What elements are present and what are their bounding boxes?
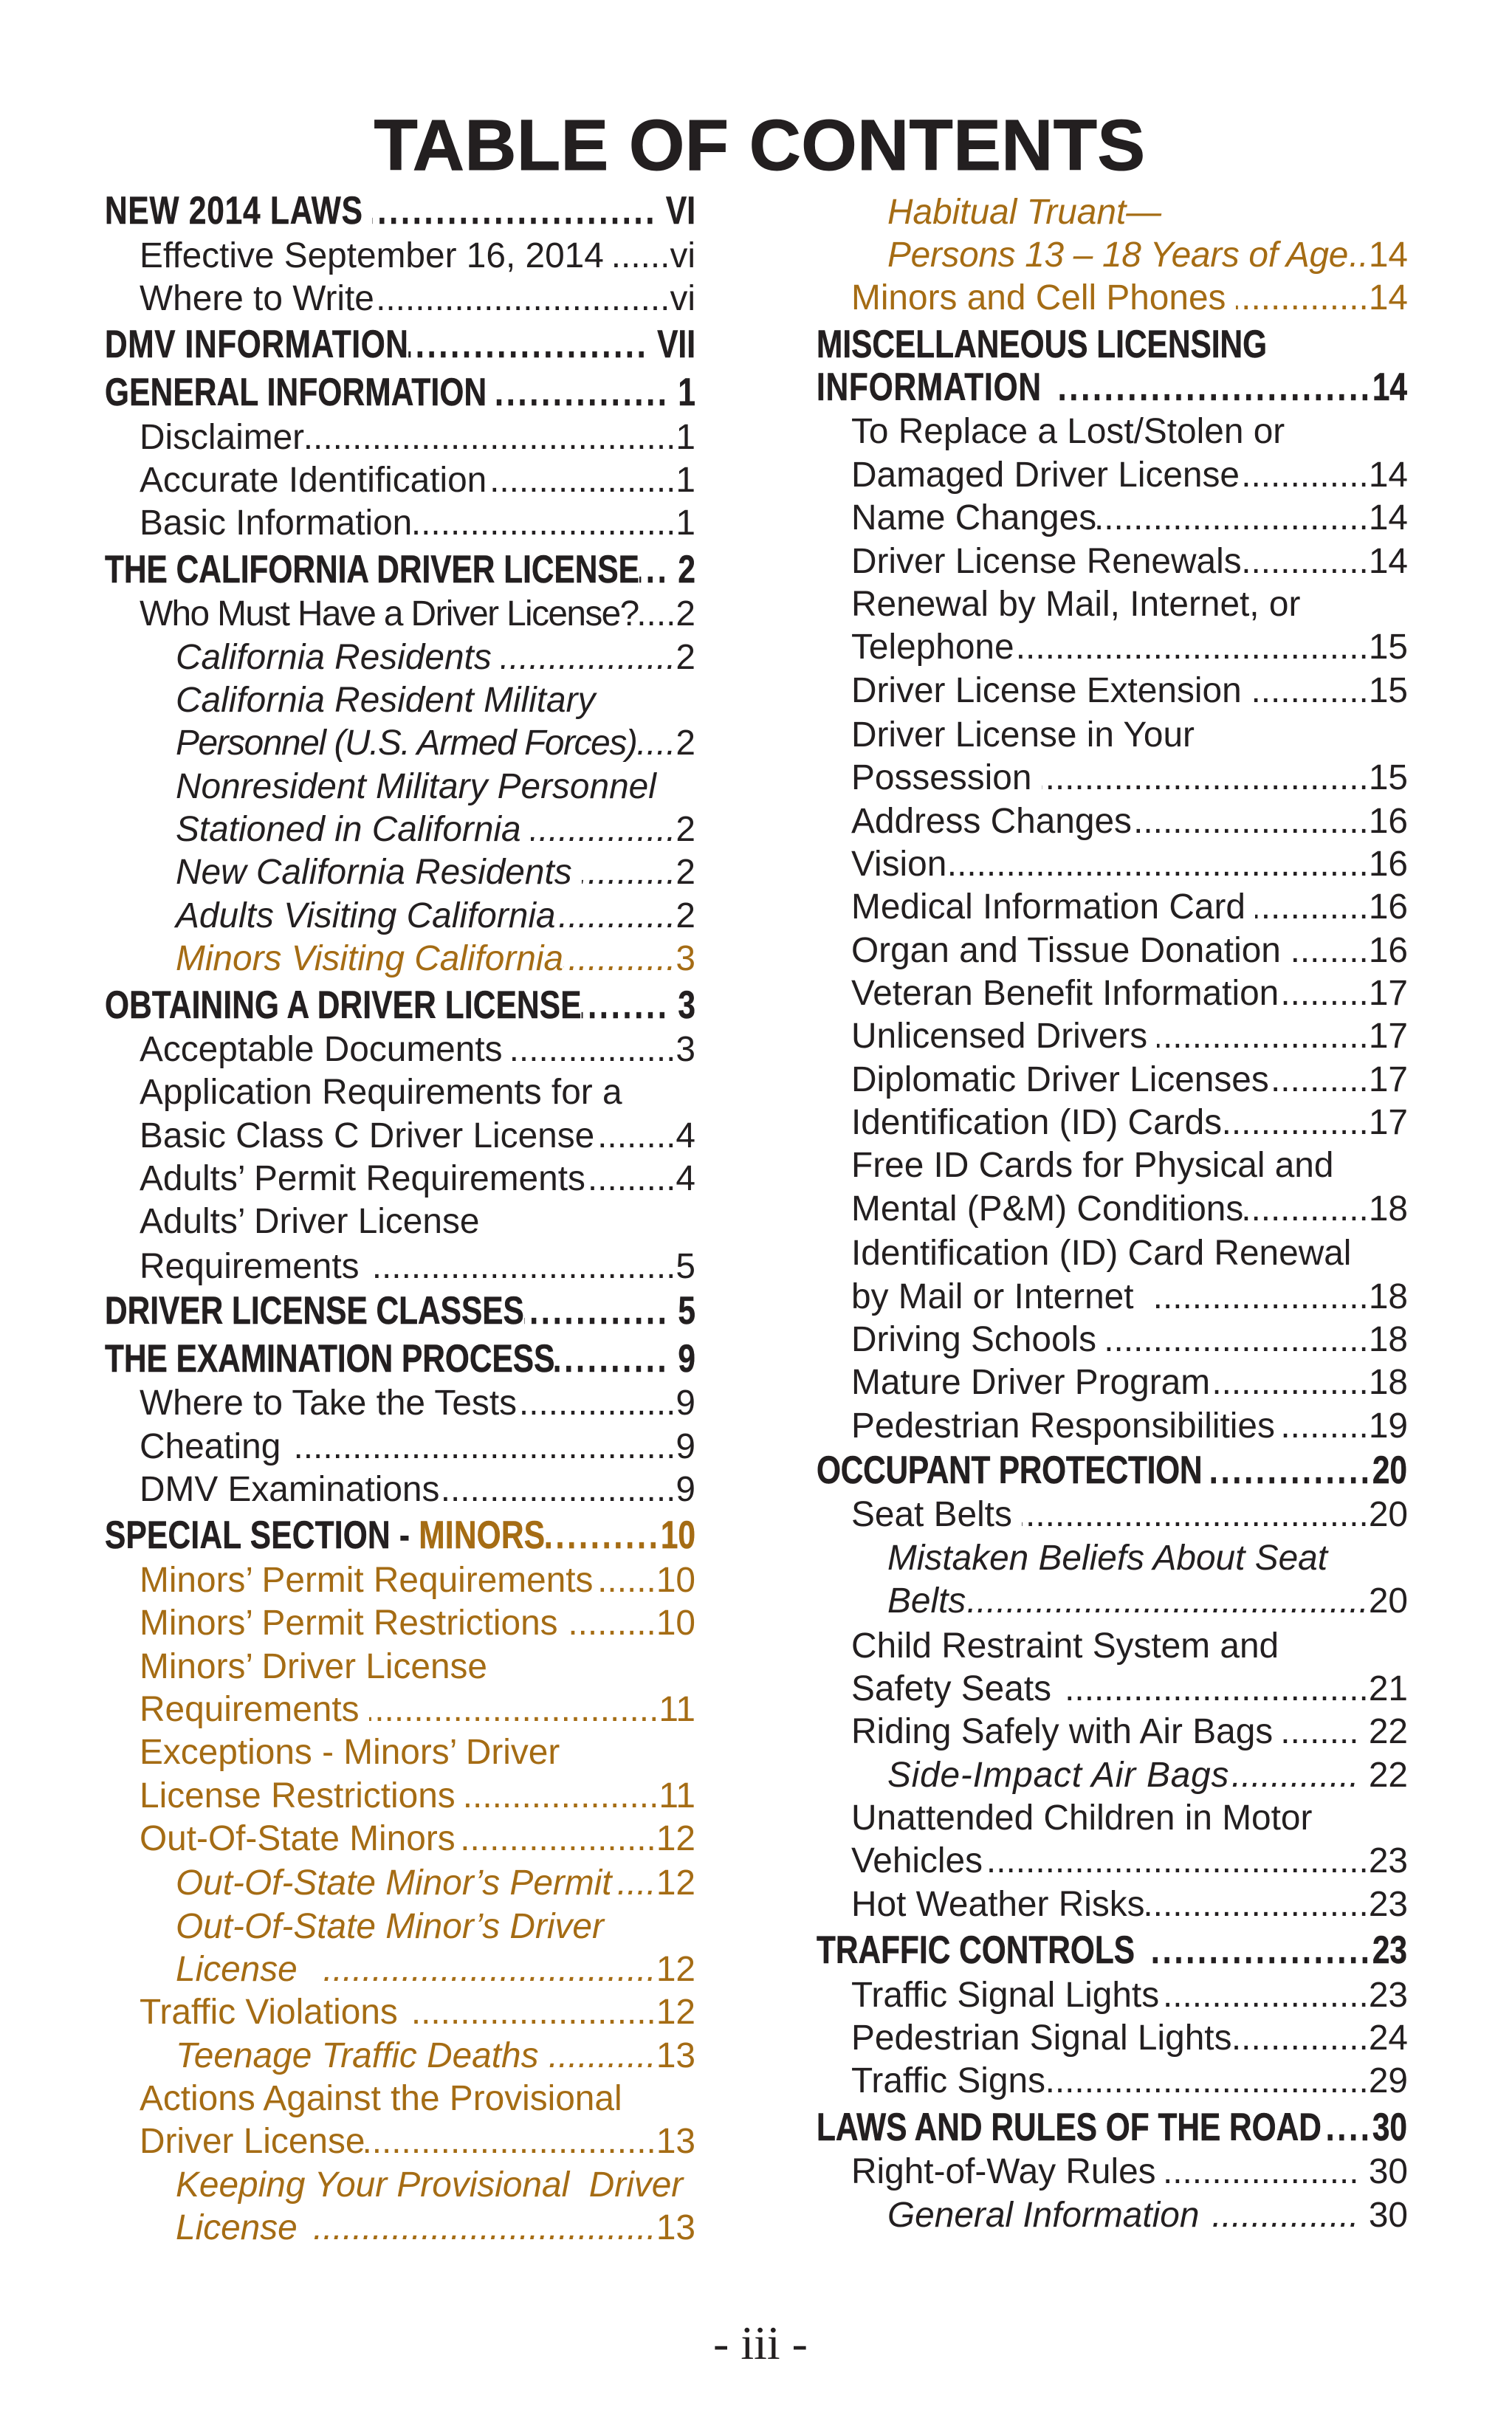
entry: safety seats: ............................... bbox=[1065, 1669, 1369, 1708]
entry: adults' driver license: Adults’ Driver License bbox=[140, 1202, 479, 1241]
entry: out-of-state minors: Out-Of-State Minors bbox=[140, 1819, 456, 1858]
entry: vision: 16 bbox=[1369, 845, 1408, 884]
entry: unlicensed drivers: Unlicensed Drivers bbox=[851, 1017, 1147, 1056]
entry: free id cards: Free ID Cards for Physical and bbox=[851, 1146, 1333, 1185]
entry: keeping your provisional driver: Keeping Your Provisional Driver bbox=[176, 2165, 683, 2205]
entry: stationed in california: ............... bbox=[531, 810, 676, 849]
entry: license bbox=[176, 1948, 695, 1991]
entry: accurate identification: ................... bbox=[489, 461, 676, 500]
entry: minors' driver license: Minors’ Driver License bbox=[140, 1647, 487, 1686]
entry: habitual truant: Habitual Truant— bbox=[887, 193, 1161, 232]
entry: requirements bbox=[140, 1247, 695, 1286]
entry: hot weather risks bbox=[851, 1883, 1408, 1926]
heading: the examination process: 9 bbox=[678, 1337, 695, 1381]
entry: by mail or internet: 18 bbox=[1369, 1277, 1408, 1316]
entry: right-of-way rules bbox=[851, 2151, 1408, 2193]
title: TABLE OF CONTENTS bbox=[374, 105, 1146, 185]
entry: driver license extension: Driver License Extension bbox=[851, 671, 1242, 710]
entry: general information: General Information bbox=[887, 2196, 1199, 2235]
entry: who must have a driver license: 2 bbox=[676, 594, 695, 633]
entry: traffic signs: ................................. bbox=[1045, 2061, 1369, 2100]
entry: persons 13 to 18 years of age: Persons 13 – 18 Years of Age bbox=[887, 236, 1348, 275]
entry: license bbox=[176, 2207, 695, 2250]
entry: california residents: .................. bbox=[501, 638, 676, 677]
entry: requirements bbox=[140, 1690, 695, 1729]
entry: teenage traffic deaths bbox=[176, 2035, 695, 2078]
entry: disclaimer: 1 bbox=[676, 418, 695, 457]
entry: requirements: 5 bbox=[676, 1247, 695, 1286]
entry: acceptable documents: Acceptable Documents bbox=[140, 1030, 503, 1069]
entry: requirements: .............................. bbox=[369, 1690, 659, 1729]
entry: who must have a driver license: Who Must Have a Driver License? bbox=[140, 594, 639, 633]
entry: where to take the tests bbox=[140, 1384, 695, 1423]
entry: accurate identification: 1 bbox=[676, 461, 695, 500]
entry: where to write: vi bbox=[670, 279, 695, 318]
entry: minors visiting california: 3 bbox=[676, 939, 695, 978]
entry: by mail or internet: by Mail or Internet bbox=[851, 1277, 1134, 1316]
entry: minors and cell phones bbox=[851, 277, 1408, 320]
entry: possession: Possession bbox=[851, 758, 1031, 797]
entry: name changes: ............................ bbox=[1096, 498, 1369, 537]
entry: california residents bbox=[176, 638, 695, 677]
entry: vehicles: 23 bbox=[1369, 1841, 1408, 1880]
entry: effective september 16, 2014: vi bbox=[670, 236, 695, 275]
heading: miscellaneous licensing: MISCELLANEOUS LICENSING bbox=[817, 323, 1267, 366]
entry: traffic violations: Traffic Violations bbox=[140, 1993, 398, 2032]
entry: out-of-state minor's driver: Out-Of-State Minor’s Driver bbox=[176, 1907, 604, 1946]
entry: right-of-way rules: .................... bbox=[1166, 2152, 1359, 2191]
entry: license: ................................... bbox=[313, 2208, 656, 2247]
entry: adults' permit requirements: ......... bbox=[588, 1159, 676, 1198]
entry: mistaken beliefs about seat: Mistaken Beliefs About Seat bbox=[887, 1539, 1327, 1578]
entry: traffic violations bbox=[140, 1991, 695, 2034]
entry: vehicles: ....................................... bbox=[986, 1841, 1369, 1880]
entry: hot weather risks: 23 bbox=[1369, 1885, 1408, 1924]
heading: general information: 1 bbox=[678, 371, 695, 414]
entry: teenage traffic deaths: Teenage Traffic Deaths bbox=[176, 2036, 539, 2075]
entry: general information: 30 bbox=[1369, 2196, 1408, 2235]
entry: organ and tissue donation: Organ and Tissue Donation bbox=[851, 931, 1281, 970]
entry: diplomatic driver licenses: 17 bbox=[1369, 1060, 1408, 1099]
heading: special section minors: 10 bbox=[661, 1513, 695, 1557]
entry: organ and tissue donation: 16 bbox=[1369, 931, 1408, 970]
entry: minors' permit requirements: Minors’ Permit Requirements bbox=[140, 1561, 593, 1600]
entry: vision: ........................................... bbox=[947, 845, 1369, 884]
heading: laws and rules of the road: 30 bbox=[1372, 2106, 1407, 2149]
entry: traffic signs: 29 bbox=[1369, 2061, 1408, 2100]
entry: driver license: .............................. bbox=[365, 2122, 656, 2161]
entry: adults visiting california: 2 bbox=[676, 896, 695, 935]
heading: dmv information bbox=[105, 323, 695, 366]
entry: basic class c driver license: ........ bbox=[597, 1116, 676, 1155]
heading: driver license classes: DRIVER LICENSE CLASSES bbox=[105, 1289, 524, 1333]
entry: hot weather risks: Hot Weather Risks bbox=[851, 1885, 1145, 1924]
entry: disclaimer bbox=[140, 418, 695, 457]
entry: safety seats: Safety Seats bbox=[851, 1669, 1051, 1708]
entry: driver license in your: Driver License in Your bbox=[851, 715, 1195, 755]
entry: where to take the tests: 9 bbox=[676, 1384, 695, 1423]
heading: traffic controls: TRAFFIC CONTROLS bbox=[817, 1928, 1135, 1972]
entry: traffic signs bbox=[851, 2060, 1408, 2103]
entry: acceptable documents bbox=[140, 1030, 695, 1069]
entry: hot weather risks: ....................... bbox=[1145, 1885, 1369, 1924]
entry: mature driver program: 18 bbox=[1369, 1363, 1408, 1402]
entry: license restrictions: 11 bbox=[659, 1776, 695, 1815]
entry: minors' permit requirements: 10 bbox=[656, 1561, 695, 1600]
entry: out-of-state minor's permit: 12 bbox=[656, 1863, 695, 1903]
entry: license: .................................. bbox=[323, 1950, 656, 1989]
heading: special section minors: .......... bbox=[545, 1514, 661, 1557]
entry: persons 13 to 18 years of age: 14 bbox=[1369, 236, 1408, 275]
entry: diplomatic driver licenses bbox=[851, 1059, 1408, 1102]
entry: by mail or internet bbox=[851, 1276, 1408, 1319]
entry: name changes bbox=[851, 497, 1408, 540]
entry: riding safely with air bags: 22 bbox=[1369, 1712, 1408, 1751]
entry: driving schools: ........................... bbox=[1106, 1320, 1369, 1359]
entry: where to write bbox=[140, 279, 695, 318]
entry: identification cards: ............... bbox=[1222, 1103, 1369, 1142]
entry: where to take the tests: ................ bbox=[519, 1384, 676, 1423]
entry: diplomatic driver licenses: .......... bbox=[1271, 1060, 1369, 1099]
entry: acceptable documents: 3 bbox=[676, 1030, 695, 1069]
heading: general information bbox=[105, 371, 695, 414]
entry: out-of-state minors: 12 bbox=[656, 1819, 695, 1858]
entry: personnel: .... bbox=[636, 724, 676, 763]
entry: pedestrian responsibilities bbox=[851, 1405, 1408, 1448]
entry: dmv examinations bbox=[140, 1470, 695, 1509]
entry: belts: ......................................... bbox=[966, 1581, 1369, 1621]
entry: medical information card: 16 bbox=[1369, 887, 1408, 927]
entry: dmv examinations: DMV Examinations bbox=[140, 1470, 439, 1509]
entry: minors' permit restrictions: ......... bbox=[568, 1604, 656, 1643]
entry: driver license renewals: Driver License Renewals bbox=[851, 542, 1242, 581]
entry: minors and cell phones: Minors and Cell Phones bbox=[851, 278, 1226, 317]
entry: telephone: .................................... bbox=[1016, 628, 1369, 667]
entry: cheating bbox=[140, 1427, 695, 1466]
entry: mature driver program: Mature Driver Program bbox=[851, 1363, 1210, 1402]
entry: basic information: Basic Information bbox=[140, 504, 412, 543]
entry: persons 13 to 18 years of age: .. bbox=[1349, 236, 1369, 275]
heading: obtaining a driver license: OBTAINING A DRIVER LICENSE bbox=[105, 983, 582, 1027]
entry: california resident military: California Resident Military bbox=[176, 681, 595, 720]
entry: identification cards bbox=[851, 1102, 1408, 1144]
entry: possession: 15 bbox=[1369, 758, 1408, 797]
entry: mental conditions: Mental (P&M) Conditions bbox=[851, 1189, 1243, 1229]
entry: mental conditions: 18 bbox=[1369, 1189, 1408, 1229]
entry: requirements: 11 bbox=[659, 1690, 695, 1729]
heading: driver license classes: 5 bbox=[678, 1289, 695, 1333]
entry: minors and cell phones: 14 bbox=[1369, 278, 1408, 317]
heading: occupant protection: .............. bbox=[1211, 1449, 1372, 1492]
entry: stationed in california: Stationed in California bbox=[176, 810, 521, 849]
entry: side-impact air bags: Side-Impact Air Bags bbox=[887, 1756, 1229, 1795]
heading: information: 14 bbox=[1372, 365, 1407, 409]
entry: vision: Vision bbox=[851, 845, 946, 884]
entry: driver license bbox=[140, 2120, 695, 2163]
entry: traffic signal lights bbox=[851, 1974, 1408, 2017]
entry: address changes: Address Changes bbox=[851, 802, 1132, 841]
entry: adults' permit requirements: 4 bbox=[676, 1159, 695, 1198]
entry: disclaimer: Disclaimer bbox=[140, 418, 304, 457]
heading: occupant protection: OCCUPANT PROTECTION bbox=[817, 1449, 1202, 1492]
entry: right-of-way rules: Right-of-Way Rules bbox=[851, 2152, 1156, 2191]
entry: out-of-state minors: .................... bbox=[460, 1819, 656, 1858]
entry: requirements: ................................ bbox=[369, 1247, 676, 1286]
entry: pedestrian responsibilities: Pedestrian Responsibilities bbox=[851, 1406, 1275, 1446]
entry: requirements: Requirements bbox=[140, 1247, 360, 1286]
entry: belts: 20 bbox=[1369, 1581, 1408, 1621]
entry: minors' permit restrictions: Minors’ Permit Restrictions bbox=[140, 1604, 558, 1643]
entry: driver license extension: 15 bbox=[1369, 671, 1408, 710]
entry: driving schools: 18 bbox=[1369, 1320, 1408, 1359]
entry: seat belts bbox=[851, 1494, 1408, 1536]
entry: teenage traffic deaths: ........... bbox=[549, 2036, 656, 2075]
entry: basic class c driver license: 4 bbox=[676, 1116, 695, 1155]
entry: minors visiting california: Minors Visiting California bbox=[176, 939, 563, 978]
entry: organ and tissue donation: ........ bbox=[1291, 931, 1369, 970]
entry: driving schools: Driving Schools bbox=[851, 1320, 1096, 1359]
entry: disclaimer: ....................................... bbox=[304, 418, 676, 457]
entry: traffic signal lights: Traffic Signal Lights bbox=[851, 1976, 1159, 2015]
heading: special section minors: SPECIAL SECTION - bbox=[105, 1513, 410, 1557]
entry: adults' permit requirements: Adults’ Permit Requirements bbox=[140, 1159, 585, 1198]
entry: personnel: Personnel (U.S. Armed Forces) bbox=[176, 724, 636, 763]
entry: renewal by mail: Renewal by Mail, Internet, or bbox=[851, 585, 1300, 624]
entry: possession bbox=[851, 757, 1408, 800]
entry: basic information bbox=[140, 504, 695, 543]
entry: new california residents: 2 bbox=[676, 853, 695, 892]
entry: pedestrian responsibilities: ......... bbox=[1280, 1406, 1369, 1446]
heading: obtaining a driver license: 3 bbox=[678, 983, 695, 1027]
entry: driver license extension: ............ bbox=[1251, 671, 1369, 710]
entry: traffic violations: ......................... bbox=[411, 1993, 656, 2032]
entry: license: 12 bbox=[656, 1950, 695, 1989]
entry: side-impact air bags bbox=[887, 1754, 1408, 1797]
entry: driver license: Driver License bbox=[140, 2122, 365, 2161]
entry: unlicensed drivers: ...................... bbox=[1157, 1017, 1369, 1056]
entry: license: License bbox=[176, 2208, 298, 2247]
entry: medical information card: Medical Information Card bbox=[851, 887, 1245, 927]
entry: driving schools bbox=[851, 1319, 1408, 1361]
heading: traffic controls bbox=[817, 1929, 1407, 1972]
heading: occupant protection: 20 bbox=[1372, 1449, 1407, 1492]
entry: dmv examinations: ........................ bbox=[441, 1470, 676, 1509]
entry: where to write: Where to Write bbox=[140, 279, 374, 318]
entry: new california residents: New California Residents bbox=[176, 853, 572, 892]
entry: traffic signal lights: 23 bbox=[1369, 1976, 1408, 2015]
entry: riding safely with air bags: ........ bbox=[1282, 1712, 1359, 1751]
heading: general information: GENERAL INFORMATION bbox=[105, 371, 487, 414]
entry: cheating: Cheating bbox=[140, 1427, 281, 1466]
entry: child restraint system and: Child Restraint System and bbox=[851, 1626, 1279, 1666]
entry: pedestrian signal lights: .............. bbox=[1231, 2018, 1369, 2058]
entry: to replace a lost/stolen or: To Replace a Lost/Stolen or bbox=[851, 412, 1285, 451]
entry: basic class c driver license: Basic Class C Driver License bbox=[140, 1116, 594, 1155]
entry: dmv examinations: 9 bbox=[676, 1470, 695, 1509]
entry: teenage traffic deaths: 13 bbox=[656, 2036, 695, 2075]
entry: accurate identification bbox=[140, 461, 695, 500]
entry: vision bbox=[851, 843, 1408, 886]
entry: mature driver program: ................ bbox=[1212, 1363, 1369, 1402]
entry: accurate identification: Accurate Identification bbox=[140, 461, 487, 500]
entry: address changes: 16 bbox=[1369, 802, 1408, 841]
entry: adults visiting california: ............ bbox=[558, 896, 676, 935]
entry: veteran benefit information: Veteran Benefit Information bbox=[851, 974, 1279, 1013]
heading: the california driver license: THE CALIFORNIA DRIVER LICENSE bbox=[105, 548, 639, 591]
entry: address changes: ........................ bbox=[1133, 802, 1369, 841]
entry: safety seats bbox=[851, 1668, 1408, 1711]
entry: diplomatic driver licenses: Diplomatic Driver Licenses bbox=[851, 1060, 1269, 1099]
entry: traffic signs: Traffic Signs bbox=[851, 2061, 1045, 2100]
entry: out-of-state minors bbox=[140, 1819, 695, 1858]
entry: application requirements: Application Requirements for a bbox=[140, 1073, 622, 1112]
heading: traffic controls: ................... bbox=[1151, 1929, 1372, 1972]
entry: damaged driver license: Damaged Driver License bbox=[851, 456, 1240, 495]
heading: information: INFORMATION bbox=[817, 365, 1042, 409]
entry: personnel: 2 bbox=[676, 724, 695, 763]
heading: the california driver license: 2 bbox=[678, 548, 695, 591]
entry: side-impact air bags: ............. bbox=[1231, 1756, 1359, 1795]
entry: medical information card bbox=[851, 886, 1408, 929]
entry: unattended children in motor: Unattended Children in Motor bbox=[851, 1798, 1312, 1838]
entry: mental conditions bbox=[851, 1188, 1408, 1231]
entry: damaged driver license: 14 bbox=[1369, 456, 1408, 495]
heading: dmv information: DMV INFORMATION bbox=[105, 323, 409, 366]
entry: license restrictions: .................... bbox=[465, 1776, 659, 1815]
entry: stationed in california: 2 bbox=[676, 810, 695, 849]
entry: veteran benefit information: ......... bbox=[1280, 974, 1369, 1013]
left column of contents bbox=[105, 189, 695, 2247]
right column of contents bbox=[817, 0, 1408, 2289]
entry: license restrictions bbox=[140, 1776, 695, 1815]
entry: name changes: 14 bbox=[1369, 498, 1408, 537]
entry: right-of-way rules: 30 bbox=[1369, 2152, 1408, 2191]
entry: vehicles: Vehicles bbox=[851, 1841, 983, 1880]
entry: possession: .................................. bbox=[1042, 758, 1369, 797]
entry: where to write: .............................. bbox=[376, 279, 670, 318]
heading: traffic controls: 23 bbox=[1372, 1928, 1407, 1972]
heading: special section minors: MINORS bbox=[419, 1513, 545, 1557]
entry: seat belts: 20 bbox=[1369, 1495, 1408, 1534]
entry: license: 13 bbox=[656, 2208, 695, 2247]
entry: stationed in california bbox=[176, 810, 695, 849]
entry: telephone bbox=[851, 626, 1408, 669]
entry: effective september 16, 2014: Effective September 16, 2014 bbox=[140, 236, 604, 275]
entry: damaged driver license: ............. bbox=[1241, 456, 1369, 495]
entry: actions against the provisional: Actions Against the Provisional bbox=[140, 2079, 622, 2118]
heading: the examination process: THE EXAMINATION PROCESS bbox=[105, 1337, 554, 1381]
entry: seat belts: Seat Belts bbox=[851, 1495, 1012, 1534]
entry: driver license: 13 bbox=[656, 2122, 695, 2161]
entry: identification cards: 17 bbox=[1369, 1103, 1408, 1142]
entry: vehicles bbox=[851, 1840, 1408, 1883]
heading: new 2014 laws bbox=[105, 189, 695, 233]
entry: pedestrian responsibilities: 19 bbox=[1369, 1406, 1408, 1446]
entry: driver license renewals: ............. bbox=[1242, 542, 1369, 581]
entry: out-of-state minor's permit: .... bbox=[617, 1863, 656, 1903]
entry: name changes: Name Changes bbox=[851, 498, 1096, 537]
entry: requirements: Requirements bbox=[140, 1690, 360, 1729]
entry: minors' permit restrictions: 10 bbox=[656, 1604, 695, 1643]
entry: california residents: California Residents bbox=[176, 638, 492, 677]
entry: pedestrian signal lights: 24 bbox=[1369, 2018, 1408, 2058]
entry: traffic signal lights: ..................... bbox=[1163, 1976, 1369, 2015]
entry: identification card renewal: Identification (ID) Card Renewal bbox=[851, 1234, 1351, 1273]
entry: riding safely with air bags bbox=[851, 1711, 1408, 1753]
entry: basic information: 1 bbox=[676, 504, 695, 543]
entry: where to take the tests: Where to Take the Tests bbox=[140, 1384, 517, 1423]
entry: pedestrian signal lights bbox=[851, 2017, 1408, 2060]
entry: california residents: 2 bbox=[676, 638, 695, 677]
entry: mental conditions: ............. bbox=[1243, 1189, 1369, 1229]
heading: occupant protection bbox=[817, 1449, 1407, 1492]
heading: special section minors bbox=[105, 1513, 695, 1557]
entry: adults visiting california: Adults Visiting California bbox=[176, 896, 556, 935]
entry: exceptions: Exceptions - Minors’ Driver bbox=[140, 1733, 560, 1772]
heading: laws and rules of the road: .... bbox=[1326, 2106, 1372, 2149]
heading: information: ........................... bbox=[1058, 366, 1372, 409]
heading: general information: ............... bbox=[495, 371, 670, 414]
entry: damaged driver license bbox=[851, 454, 1408, 497]
entry: driver license renewals bbox=[851, 540, 1408, 583]
entry: minors' permit requirements: ...... bbox=[597, 1561, 656, 1600]
entry: traffic violations: 12 bbox=[656, 1993, 695, 2032]
entry: side-impact air bags: 22 bbox=[1369, 1756, 1408, 1795]
entry: safety seats: 21 bbox=[1369, 1669, 1408, 1708]
entry: belts: Belts bbox=[887, 1581, 966, 1621]
entry: seat belts: .................................... bbox=[1022, 1495, 1369, 1534]
entry: veteran benefit information: 17 bbox=[1369, 974, 1408, 1013]
entry: out-of-state minor's permit: Out-Of-State Minor’s Permit bbox=[176, 1863, 612, 1903]
entry: cheating: ........................................ bbox=[291, 1427, 676, 1466]
entry: mature driver program bbox=[851, 1361, 1408, 1404]
entry: address changes bbox=[851, 800, 1408, 843]
heading: laws and rules of the road: LAWS AND RULES OF THE ROAD bbox=[817, 2106, 1322, 2149]
entry: riding safely with air bags: Riding Safely with Air Bags bbox=[851, 1712, 1273, 1751]
entry: license restrictions: License Restrictions bbox=[140, 1776, 456, 1815]
entry: pedestrian signal lights: Pedestrian Signal Lights bbox=[851, 2018, 1231, 2058]
heading: dmv information: VII bbox=[657, 323, 695, 366]
heading: new 2014 laws: VI bbox=[666, 189, 695, 233]
entry: general information bbox=[887, 2194, 1408, 2237]
entry: unlicensed drivers: 17 bbox=[1369, 1017, 1408, 1056]
page number: - iii - bbox=[713, 2317, 808, 2369]
entry: driver license extension bbox=[851, 670, 1408, 712]
entry: unlicensed drivers bbox=[851, 1015, 1408, 1058]
entry: identification cards: Identification (ID) Cards bbox=[851, 1103, 1222, 1142]
heading: information bbox=[817, 366, 1407, 409]
entry: nonresident military personnel: Nonresident Military Personnel bbox=[176, 767, 656, 806]
entry: driver license renewals: 14 bbox=[1369, 542, 1408, 581]
entry: license: License bbox=[176, 1950, 298, 1989]
entry: telephone: Telephone bbox=[851, 628, 1014, 667]
heading: new 2014 laws: NEW 2014 LAWS bbox=[105, 189, 363, 233]
entry: telephone: 15 bbox=[1369, 628, 1408, 667]
entry: cheating: 9 bbox=[676, 1427, 695, 1466]
entry: acceptable documents: ................. bbox=[512, 1030, 676, 1069]
